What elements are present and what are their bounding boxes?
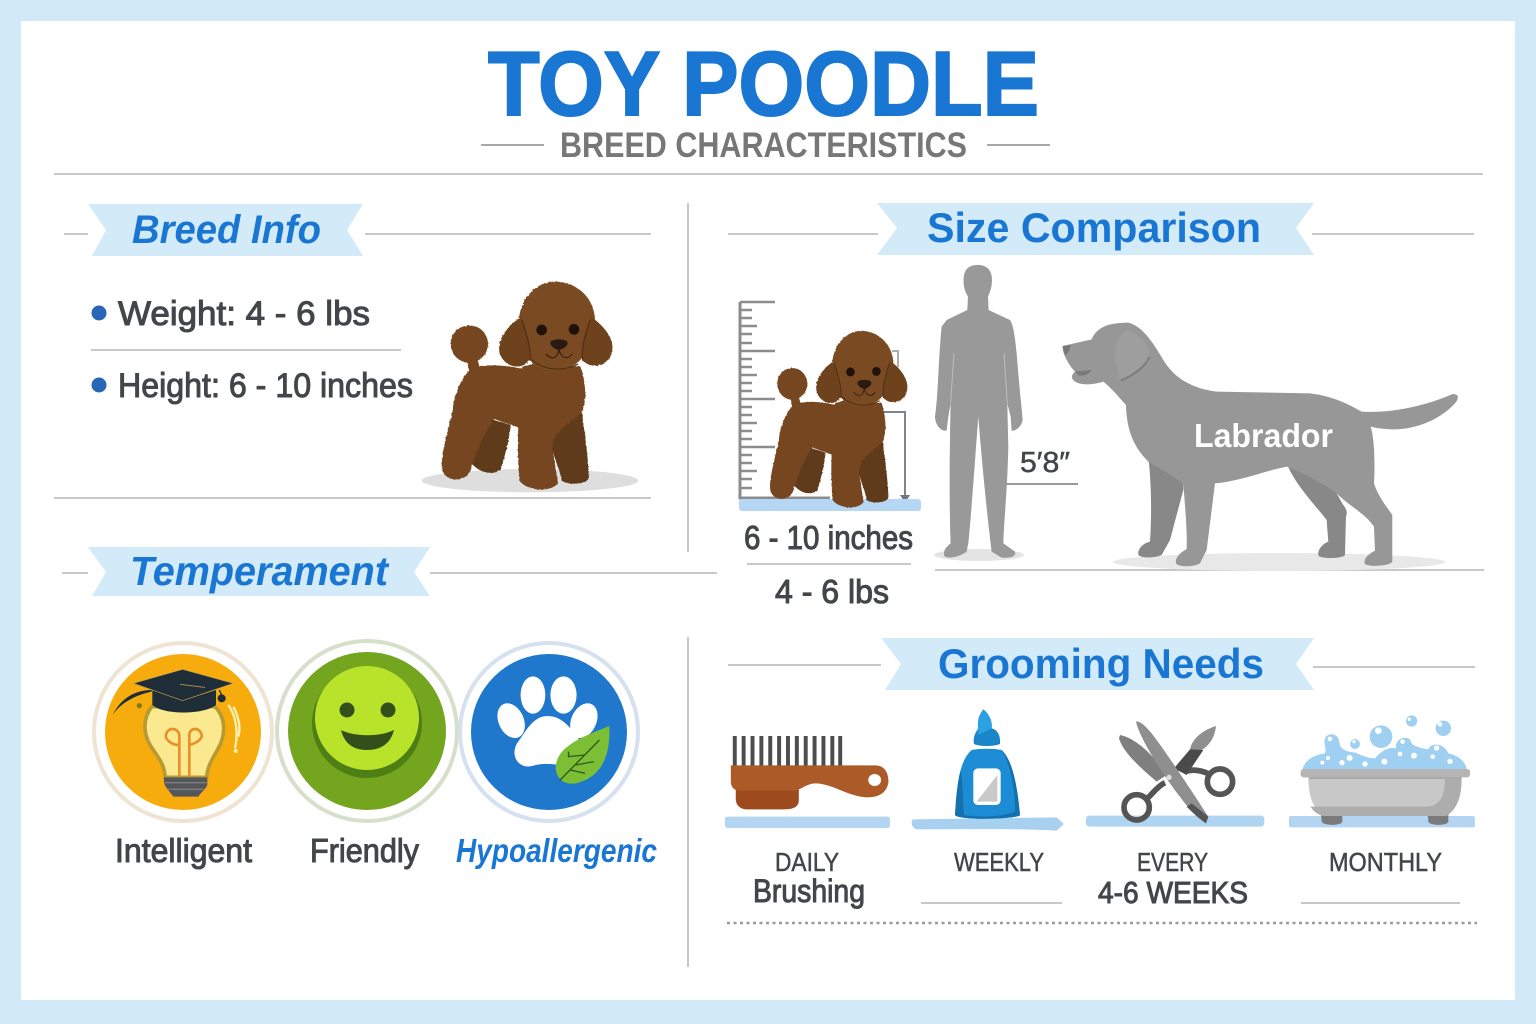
human silhouette — [934, 265, 1024, 561]
fact: weight: Weight: 4 - 6 lbs — [118, 295, 370, 333]
icon: scissors — [1086, 721, 1264, 827]
panel: grooming needs — [725, 638, 1477, 923]
illustration: toy poodle — [422, 282, 638, 492]
label: daily brushing — [753, 847, 865, 909]
heading: grooming needs: Grooming Needs — [938, 640, 1264, 687]
label: poodle height: 6 - 10 inches — [744, 519, 913, 556]
heading: breed info: Breed Info — [132, 208, 321, 252]
label: weekly: WEEKLY — [954, 847, 1044, 877]
panel: temperament — [62, 547, 717, 869]
icon: brush — [725, 736, 890, 828]
label: daily brushing: DAILY — [775, 847, 839, 877]
label: human height — [1006, 447, 1078, 484]
label: intelligent: Intelligent — [115, 832, 252, 869]
illustration: toy poodle at scale — [770, 331, 907, 507]
panel: breed info — [54, 204, 651, 498]
subtitle: BREED CHARACTERISTICS — [560, 126, 967, 165]
fact: height: Height: 6 - 10 inches — [118, 367, 413, 405]
panel: size comparison — [728, 203, 1484, 610]
heading: breed info — [88, 204, 363, 256]
icon: friendly smiley — [277, 641, 457, 821]
label: poodle weight: 4 - 6 lbs — [775, 573, 889, 610]
height ruler — [740, 302, 830, 498]
heading: temperament: Temperament — [130, 548, 390, 594]
label: human height: 5′8″ — [1020, 447, 1070, 479]
icon: intelligent light bulb — [94, 643, 272, 821]
label: every 4-6 weeks: 4-6 WEEKS — [1098, 875, 1248, 910]
icon: shampoo bottle — [912, 709, 1064, 831]
heading: size comparison: Size Comparison — [927, 204, 1261, 251]
title: TOY POODLE — [488, 34, 1039, 135]
label: every 4-6 weeks: EVERY — [1137, 847, 1208, 877]
platform — [739, 499, 921, 511]
label: monthly: MONTHLY — [1329, 847, 1442, 877]
icon: hypoallergenic paw and leaf — [460, 643, 638, 821]
measuring arrow — [882, 351, 910, 503]
icon: bubble bath — [1289, 715, 1475, 827]
labrador silhouette: Labrador — [1194, 417, 1333, 454]
labrador silhouette — [1063, 323, 1458, 571]
label: daily brushing: Brushing — [753, 873, 865, 909]
label: hypoallergenic: Hypoallergenic — [456, 832, 657, 869]
label: every 4-6 weeks — [1098, 847, 1248, 910]
label: friendly: Friendly — [310, 832, 419, 869]
